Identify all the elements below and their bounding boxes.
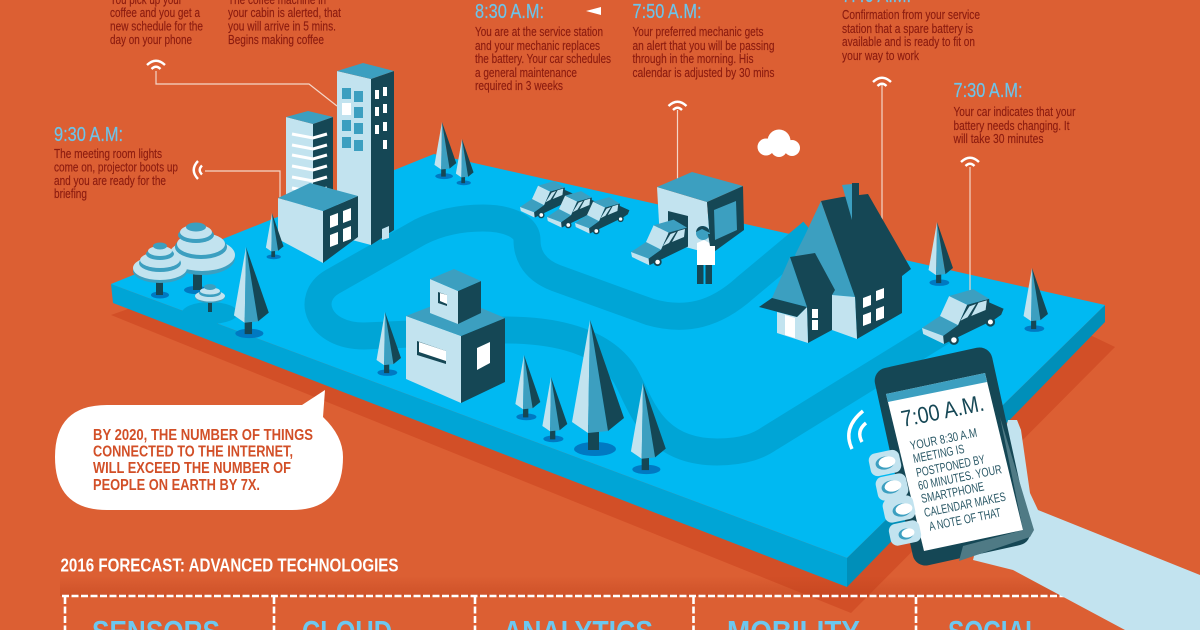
text block: 8:30 A.M: 8:30 A.M: xyxy=(475,1,544,23)
callout bubble xyxy=(55,390,343,510)
text block: 7:50 A.M xyxy=(632,1,775,80)
phone message: 60 MINUTES. YOUR xyxy=(917,462,1003,493)
isometric city platform xyxy=(111,154,1105,587)
text block: 9:30 A.M xyxy=(54,124,178,201)
small cube building xyxy=(278,183,358,263)
connector lines xyxy=(156,71,970,297)
small white arrow xyxy=(586,7,601,15)
text block: 7:50 A.M: an alert that you will be passing xyxy=(632,39,775,53)
text block: 7:30 A.M: Your car indicates that your xyxy=(954,105,1076,119)
house xyxy=(759,183,911,343)
text block: 7:40 A.M: your way to work xyxy=(842,49,920,63)
phone message: SMARTPHONE xyxy=(920,479,985,506)
phone message: CALENDAR MAKES xyxy=(923,490,1007,520)
callout bubble: PEOPLE ON EARTH BY 7X. xyxy=(93,477,260,494)
phone message xyxy=(909,426,1007,534)
phone signal xyxy=(849,411,866,449)
smartphone xyxy=(872,345,1034,568)
text block: 8:30 A.M xyxy=(475,1,611,93)
text block: 7:50 A.M: 7:50 A.M: xyxy=(632,1,702,23)
text block: 7:50 A.M: calendar is adjusted by 30 mins xyxy=(632,66,774,80)
text block: 8:30 A.M: the battery. Your car schedules xyxy=(475,52,611,66)
table shadow xyxy=(111,200,1115,613)
shadow band above forecast table xyxy=(60,576,1100,596)
callout bubble: BY 2020, THE NUMBER OF THINGS xyxy=(93,427,313,444)
text block: 8:30 A.M: and your mechanic replaces xyxy=(475,39,600,53)
forecast heading: 2016 FORECAST: ADVANCED TECHNOLOGIES xyxy=(60,556,398,576)
text block: 7:40 A.M: station that a spare battery is xyxy=(842,22,973,36)
parked cars xyxy=(520,181,629,234)
wifi signal icons xyxy=(147,61,979,179)
car at service station xyxy=(631,220,687,265)
service station xyxy=(657,172,744,254)
text block: coffee schedule: day on your phone xyxy=(110,33,192,47)
text block: coffee schedule: new schedule for the xyxy=(110,20,203,34)
text block: 7:50 A.M: Your preferred mechanic gets xyxy=(632,25,764,39)
text block: 7:40 A.M: Confirmation from your service xyxy=(842,8,980,22)
text block: coffee schedule xyxy=(110,0,203,47)
text block: 7:30 A.M: will take 30 minutes xyxy=(953,132,1044,146)
text block: 7:40 A.M xyxy=(842,0,980,63)
text block: coffee machine: Begins making coffee xyxy=(228,33,324,47)
text block: 9:30 A.M: 9:30 A.M: xyxy=(54,124,123,146)
text block: 9:30 A.M: briefing xyxy=(54,187,87,201)
mid office building xyxy=(286,111,333,205)
text block: 7:30 A.M xyxy=(953,80,1076,146)
text block: 8:30 A.M: a general maintenance xyxy=(475,66,577,80)
hand and arm xyxy=(973,420,1200,630)
forecast table xyxy=(62,596,1075,630)
text block: 9:30 A.M: come on, projector boots up xyxy=(54,160,178,174)
phone message: A NOTE OF THAT xyxy=(928,505,1002,534)
text block: coffee machine xyxy=(228,0,341,47)
callout bubble: WILL EXCEED THE NUMBER OF xyxy=(93,460,291,477)
cloud xyxy=(758,130,800,157)
text block: 7:30 A.M: battery needs changing. It xyxy=(954,119,1070,133)
tall office building xyxy=(337,63,394,245)
phone message: POSTPONED BY xyxy=(915,452,987,480)
text block: 7:50 A.M: through in the morning. His xyxy=(632,52,754,66)
text block: 7:40 A.M: available and is ready to fit on xyxy=(842,35,975,49)
car by the house xyxy=(922,289,1004,344)
round trees xyxy=(133,222,238,324)
road xyxy=(318,218,945,452)
fingers xyxy=(867,449,922,547)
text block: 8:30 A.M: required in 3 weeks xyxy=(475,79,563,93)
text block: 9:30 A.M: The meeting room lights xyxy=(54,147,162,161)
phone message: MEETING IS xyxy=(912,442,966,466)
text block: coffee machine: you will arrive in 5 mins. xyxy=(228,20,336,34)
smartphone: 7:00 A.M. xyxy=(899,390,986,432)
text block: 9:30 A.M: and you are ready for the xyxy=(54,174,166,188)
text block: coffee machine: your cabin is alerted, that xyxy=(228,6,341,20)
central building xyxy=(406,269,505,403)
mechanic xyxy=(696,226,715,284)
text block: 7:30 A.M: 7:30 A.M: xyxy=(954,80,1022,102)
text block: 8:30 A.M: You are at the service station xyxy=(475,25,603,39)
conical trees xyxy=(234,122,1048,474)
phone message: YOUR 8:30 A.M xyxy=(909,426,978,453)
text block: coffee schedule: coffee and you get a xyxy=(110,6,200,20)
callout bubble: CONNECTED TO THE INTERNET, xyxy=(93,444,293,460)
